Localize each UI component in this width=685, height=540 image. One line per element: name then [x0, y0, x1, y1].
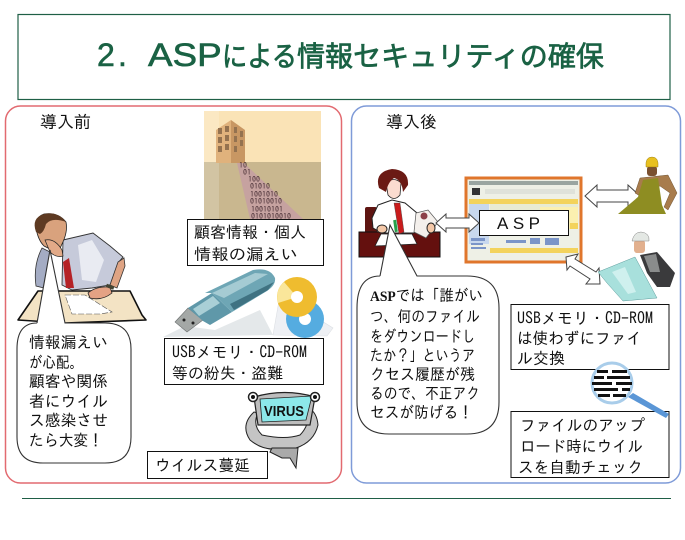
heading: after: 導入後: [386, 113, 437, 131]
illustration: worried man at desk: [18, 213, 146, 323]
callout bubble: access history: [357, 225, 499, 434]
callout: automatic virus check: スを自動チェック: [518, 459, 643, 475]
callout bubble: worry about leaks: ス感染させ: [29, 412, 108, 428]
ASP label: ASP: [497, 214, 545, 233]
callout: virus spread: ウイルス蔓延: [155, 457, 250, 473]
callout: USB and CD loss: USBメモリ・CD-ROM: [172, 344, 307, 360]
callout: file exchange without USB: は使わずにファイ: [517, 330, 642, 346]
callout bubble: access history: をダウンロードし: [370, 328, 475, 344]
callout: file exchange without USB: [511, 304, 669, 370]
illustration: building leaking data: 10010101: [251, 205, 283, 213]
callout: automatic virus check: [511, 412, 669, 478]
callout: customer information leak: 情報の漏えい: [194, 246, 298, 262]
callout: customer information leak: 顧客情報・個人: [194, 224, 306, 240]
callout bubble: access history: たか？」というア: [370, 347, 475, 363]
title box: [18, 14, 670, 100]
callout: file exchange without USB: USBメモリ・CD-ROM: [517, 310, 653, 326]
callout: file exchange without USB: ル交換: [517, 350, 565, 366]
panel: after introduction: [352, 106, 680, 483]
callout bubble: worry about leaks: [17, 250, 131, 463]
callout bubble: worry about leaks: が心配。: [29, 354, 83, 370]
title text: .: [118, 37, 127, 73]
panel: before introduction: [6, 106, 342, 483]
arrow: ASP to engineer: [566, 254, 600, 284]
callout bubble: access history: セスが防げる！: [370, 403, 473, 420]
illustration: building leaking data: 01010010: [250, 197, 282, 205]
illustration: building leaking data: 1001010: [250, 190, 278, 198]
illustration: virus computer: [246, 392, 320, 468]
illustration: building leaking data: 01010: [250, 182, 270, 190]
callout bubble: access history: クセス履歴が残: [370, 366, 475, 382]
callout bubble: worry about leaks: 情報漏えい: [29, 334, 108, 350]
callout bubble: worry about leaks: 者にウイル: [29, 393, 108, 409]
callout: virus spread: [148, 452, 268, 478]
callout: USB and CD loss: [164, 338, 324, 384]
illustration: building leaking data: 100: [248, 175, 260, 183]
heading: before: 導入前: [40, 113, 91, 131]
illustration: building leaking data: 0101010010: [251, 212, 291, 220]
illustration: virus computer: VIRUS: [264, 403, 304, 420]
title text: ASP: [148, 38, 222, 73]
title text: 情報セキュリティの確保: [297, 35, 604, 75]
arrow: ASP to construction worker: [585, 185, 640, 207]
illustration: building leaking data: [204, 111, 321, 220]
illustration: ASP web screen: [466, 178, 581, 262]
callout bubble: access history: るので、不正アク: [370, 385, 480, 401]
title text: による: [222, 35, 297, 75]
illustration: office worker at desk: [359, 169, 440, 257]
callout: automatic virus check: ロード時にウイル: [520, 438, 643, 454]
bottom rule: [22, 498, 671, 500]
callout bubble: access history: つ、何のファイル: [370, 308, 480, 324]
illustration: building leaking data: 01: [243, 168, 251, 176]
callout: USB and CD loss: 等の紛失・盗難: [172, 365, 283, 381]
illustration: engineer with blueprint: [598, 232, 675, 301]
callout bubble: worry about leaks: 顧客や関係: [29, 373, 108, 389]
callout: automatic virus check: ファイルのアップ: [520, 417, 645, 433]
icon: magnifying glass: [592, 363, 669, 418]
arrow: worker to ASP: [436, 214, 479, 232]
title text: 2: [97, 37, 115, 73]
illustration: USB memory and CDs: [163, 269, 333, 338]
callout bubble: worry about leaks: たら大変！: [29, 432, 103, 448]
illustration: building leaking data: 10: [239, 161, 247, 169]
title text: [97, 35, 604, 75]
illustration: construction worker: [618, 157, 677, 214]
callout bubble: access history: ASPでは「誰がい: [370, 287, 483, 305]
callout: customer information leak: [188, 220, 324, 266]
